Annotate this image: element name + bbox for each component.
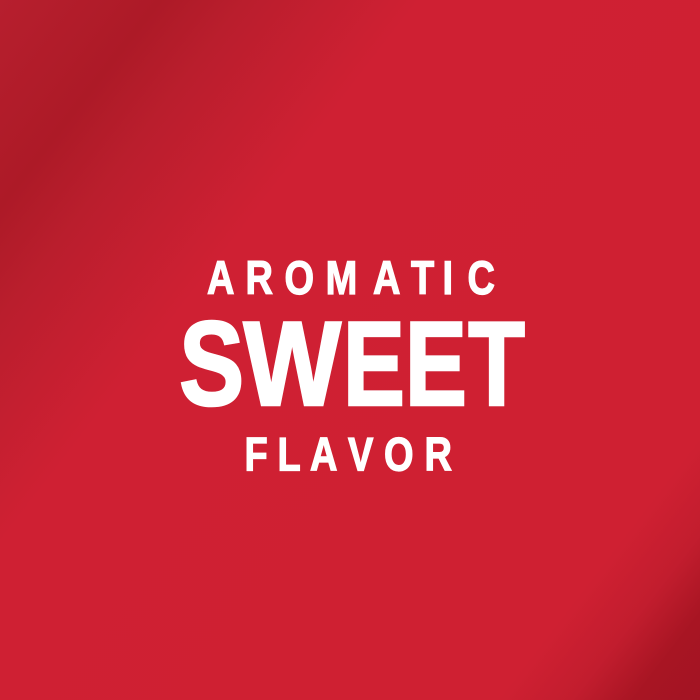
heading: SWEET xyxy=(179,296,525,431)
heading: SWEET: W xyxy=(244,297,341,431)
heading: SWEET: E xyxy=(343,296,405,431)
heading: SWEET: T xyxy=(468,296,525,431)
heading: AROMATIC: AROMATIC xyxy=(207,252,495,305)
heading: SWEET: E xyxy=(405,296,467,431)
heading: FLAVOR: FLAVOR xyxy=(244,428,452,481)
heading: SWEET: S xyxy=(179,297,244,431)
